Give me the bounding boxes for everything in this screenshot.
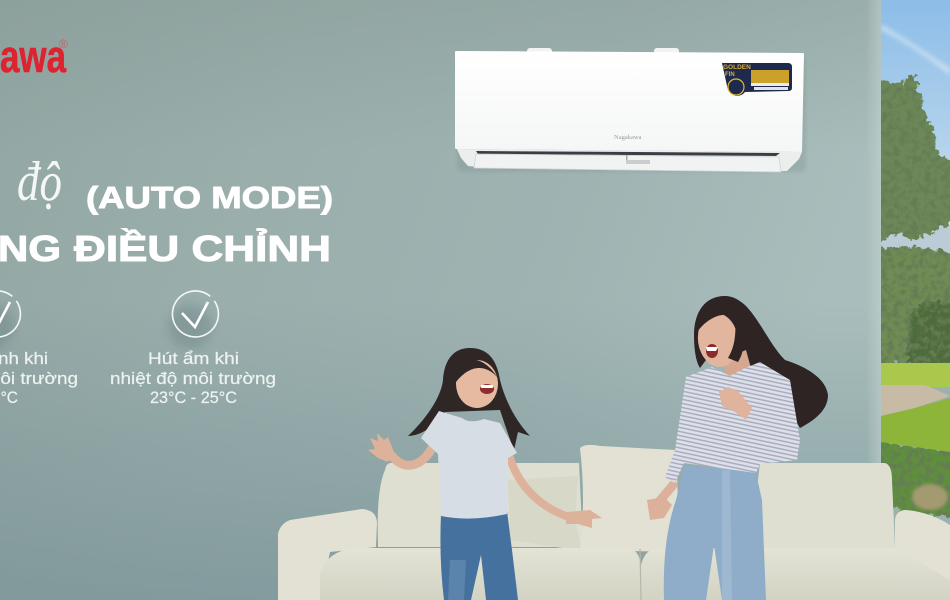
- feature text: dehumidify: 23°C - 25°C: [150, 389, 237, 407]
- auto mode label: (AUTO MODE): [86, 180, 333, 215]
- hair back: [694, 296, 828, 428]
- right arm: [510, 458, 572, 518]
- sofa back left: [378, 463, 583, 547]
- golden fin badge: GOLDEN: [723, 64, 751, 71]
- shirt: [421, 411, 517, 519]
- air conditioner unit: [455, 48, 806, 172]
- left hand: [368, 433, 394, 462]
- face: [456, 360, 498, 408]
- jeans: [664, 466, 766, 600]
- sofa back right: [750, 463, 895, 548]
- mouth: [480, 384, 494, 394]
- feature text: dehumidify: Hút ẩm khi: [148, 350, 239, 368]
- check icon: dehumidify: [168, 291, 218, 349]
- right hand: [566, 510, 602, 528]
- feature text: dehumidify: [110, 350, 276, 407]
- bush: [881, 442, 950, 518]
- feature text: dehumidify: nhiệt độ môi trường: [110, 370, 276, 388]
- golden fin badge: [722, 63, 792, 96]
- heading end: ĐIỀU CHỈNH: [74, 228, 331, 269]
- sofa: [278, 445, 950, 600]
- brand logo: awa: [0, 31, 67, 82]
- neck: [722, 350, 752, 380]
- girl figure: [368, 348, 602, 600]
- woman figure: [647, 296, 828, 600]
- feature text: cooling: [0, 350, 78, 407]
- tree: [881, 74, 950, 242]
- centre cushion: [580, 445, 680, 552]
- right arm: [895, 510, 950, 580]
- script word: độ: độ: [17, 151, 62, 213]
- jeans: [440, 511, 518, 600]
- outdoor view through window: [881, 0, 950, 518]
- raised hand: [719, 387, 752, 420]
- left arm and hand: [658, 485, 673, 503]
- mouth: [706, 344, 718, 358]
- golden fin badge: FIN: [725, 72, 735, 78]
- left arm: [278, 509, 377, 600]
- left arm: [392, 448, 432, 465]
- face: [694, 310, 742, 370]
- shirt: [665, 362, 800, 483]
- small pillow: [508, 476, 582, 551]
- heading: [0, 151, 333, 269]
- right seat: [641, 548, 950, 600]
- check icon: cooling: [0, 291, 20, 349]
- hair back: [408, 348, 530, 450]
- hills: [881, 244, 950, 363]
- brand name on unit: Nagakawa: [614, 134, 642, 141]
- left seat: [320, 548, 641, 600]
- registered mark: ®: [59, 37, 68, 51]
